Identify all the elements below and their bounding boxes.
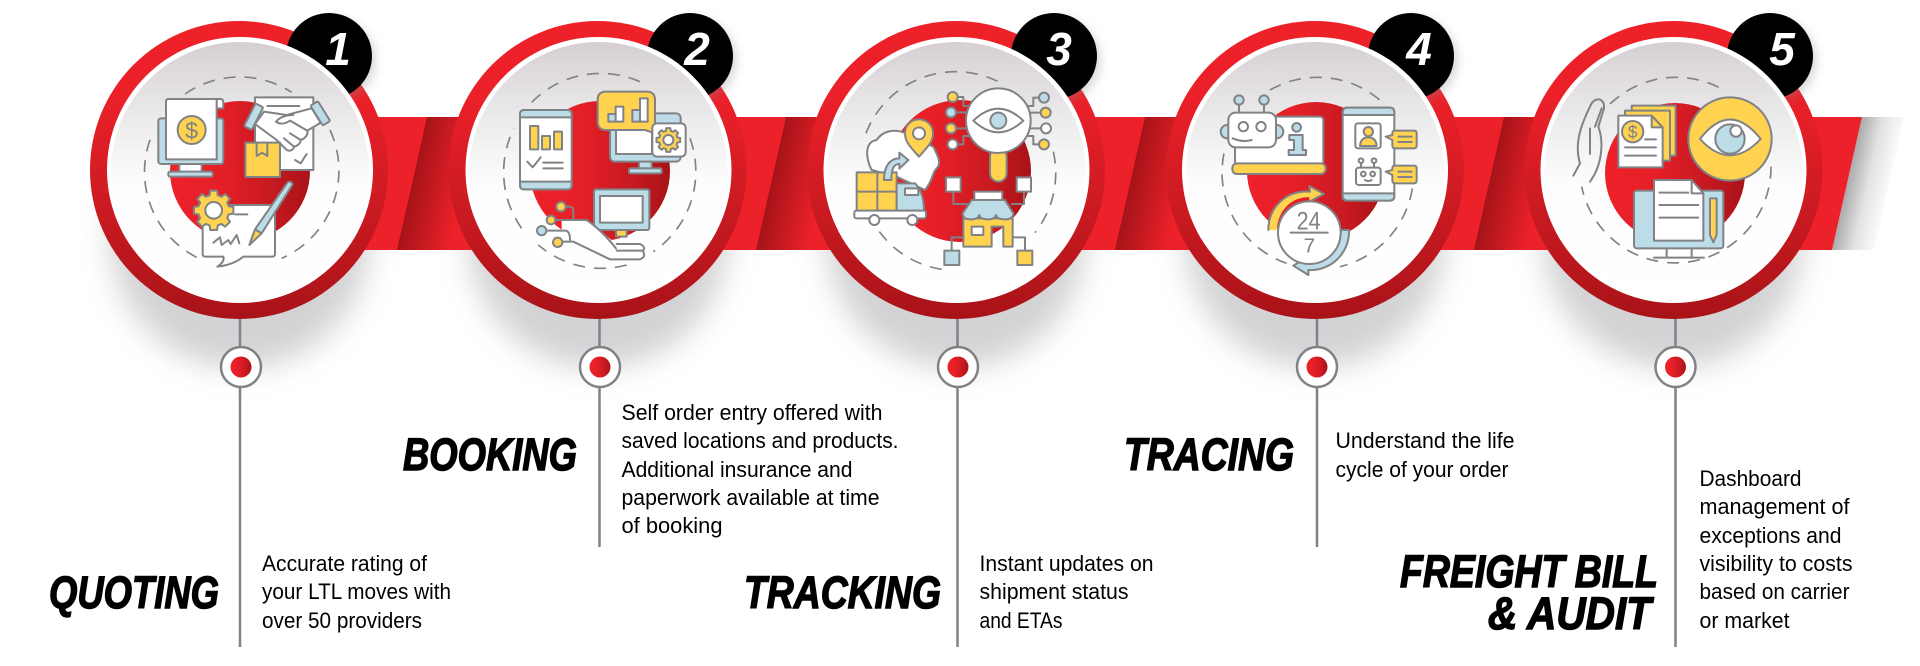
icon: freight bill and audit: [1573, 77, 1772, 263]
red ribbon band: [300, 117, 1904, 250]
step 4 circle: [1166, 13, 1464, 319]
step 1 description: [262, 551, 451, 633]
step 5 heading: freight bill and audit: & AUDIT: [1488, 588, 1654, 639]
number badge 3: [1011, 13, 1100, 102]
step 5 circle: [1524, 13, 1822, 319]
step 4 description: cycle of your order: [1336, 457, 1508, 482]
number badge 1: [286, 13, 375, 102]
step 5 description: Dashboard: [1700, 466, 1802, 491]
icon: freight bill and audit: $: [1628, 122, 1638, 142]
number badge 1: 1: [325, 23, 351, 75]
step 2 description: Self order entry offered with: [622, 400, 882, 425]
step 5 description: or market: [1700, 608, 1790, 633]
icon: tracing: 7: [1304, 234, 1315, 257]
step 2 heading: booking: BOOKING: [403, 429, 577, 480]
number badge 2: 2: [683, 23, 710, 75]
step 2 description: [622, 400, 898, 538]
step 5 description: visibility to costs: [1700, 551, 1852, 576]
step 5 description: [1700, 466, 1852, 633]
step 3 description: [980, 551, 1154, 633]
step 2 description: paperwork available at time: [622, 485, 880, 510]
icon: tracing: [1221, 77, 1417, 275]
step 3 heading: tracking: TRACKING: [744, 567, 941, 618]
number badge 4: [1368, 13, 1457, 102]
step 1 heading: quoting: QUOTING: [49, 567, 219, 618]
step 5 description: management of: [1700, 494, 1850, 519]
number badge 2: [647, 13, 736, 102]
icon: booking: [504, 73, 696, 268]
drop shadows under circles: [110, 108, 1803, 368]
step 1 description: your LTL moves with: [262, 579, 451, 604]
icon: tracking: [854, 72, 1056, 269]
connector lines and nodes: [221, 315, 1696, 647]
number badge 3: 3: [1046, 23, 1072, 75]
step 2 description: saved locations and products.: [622, 428, 898, 453]
step 5 heading: freight bill and audit: FREIGHT BILL: [1400, 546, 1658, 597]
step 2 circle: [448, 13, 746, 319]
number badge 5: 5: [1769, 23, 1796, 75]
step 4 heading: tracing: TRACING: [1124, 429, 1294, 480]
step 3 description: and ETAs: [980, 608, 1062, 633]
step 5 description: based on carrier: [1700, 579, 1850, 604]
number badge 4: 4: [1405, 23, 1432, 75]
step 1 description: Accurate rating of: [262, 551, 428, 576]
icon: quoting: [144, 77, 339, 267]
step 4 description: [1336, 428, 1514, 482]
step 2 description: Additional insurance and: [622, 457, 852, 482]
step 3 circle: [807, 13, 1105, 319]
icon: tracing: 24: [1297, 207, 1321, 235]
icon: quoting: $: [185, 117, 198, 143]
step 5 description: exceptions and: [1700, 523, 1842, 548]
number badge 5: [1727, 13, 1816, 102]
step 4 description: Understand the life: [1336, 428, 1514, 453]
step 1 circle: [90, 13, 388, 319]
step 3 description: Instant updates on: [980, 551, 1154, 576]
step 2 description: of booking: [622, 513, 722, 538]
step 5 heading: freight bill and audit: [1400, 546, 1658, 639]
step 1 description: over 50 providers: [262, 608, 422, 633]
step 3 description: shipment status: [980, 579, 1128, 604]
